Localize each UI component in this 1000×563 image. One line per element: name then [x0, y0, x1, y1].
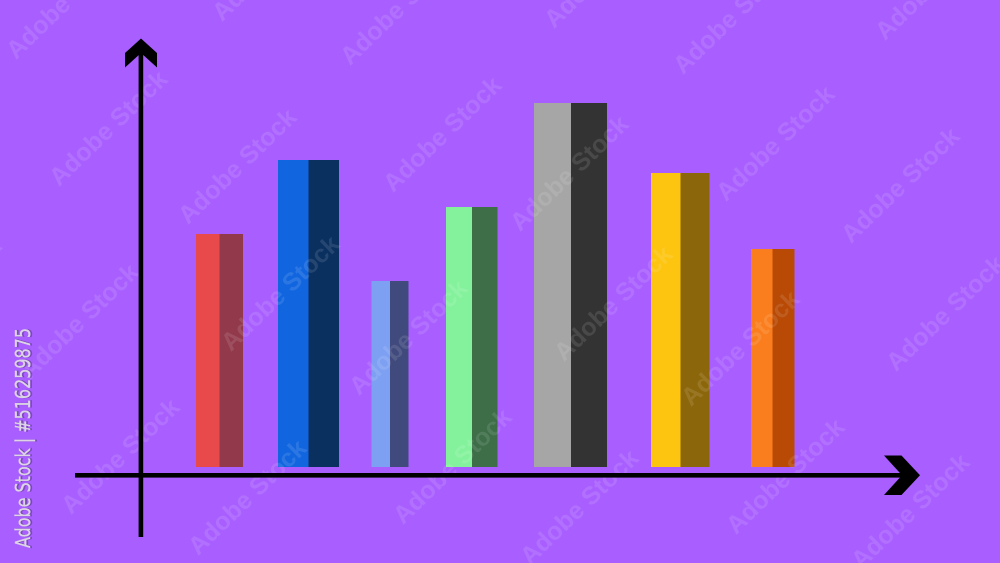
bar: periwinkle [372, 281, 408, 467]
watermarks: Adobe Stock [216, 230, 345, 356]
arrow: horizontal axis [75, 456, 920, 495]
bar: orange [751, 249, 794, 467]
watermarks: Adobe Stock [344, 274, 473, 400]
watermarks: Adobe Stock [44, 65, 173, 191]
bar: red [196, 234, 243, 467]
bar: grey [534, 103, 607, 467]
watermarks: Adobe Stock [183, 434, 312, 560]
watermarks: Adobe Stock [721, 413, 850, 539]
watermarks: Adobe Stock [173, 103, 302, 229]
watermark id: vertical stock text: Adobe Stock | #516259875 [12, 328, 36, 548]
bar: yellow [651, 173, 710, 467]
bar: blue [278, 160, 339, 467]
watermarks: Adobe Stock [836, 122, 965, 248]
watermarks: Adobe Stock [549, 240, 678, 366]
watermarks: Adobe Stock [378, 71, 507, 197]
watermarks: Adobe Stock [676, 285, 805, 411]
watermarks: Adobe Stock [711, 80, 840, 206]
watermarks: Adobe Stock [15, 258, 144, 384]
watermark id: vertical stock text: Adobe Stock | #516259875 [11, 328, 35, 548]
bar: green [446, 207, 498, 467]
watermarks: Adobe Stock [56, 393, 185, 519]
watermarks: Adobe Stock [505, 110, 634, 236]
watermarks: Adobe Stock [388, 403, 517, 529]
arrow: vertical axis [125, 38, 157, 537]
